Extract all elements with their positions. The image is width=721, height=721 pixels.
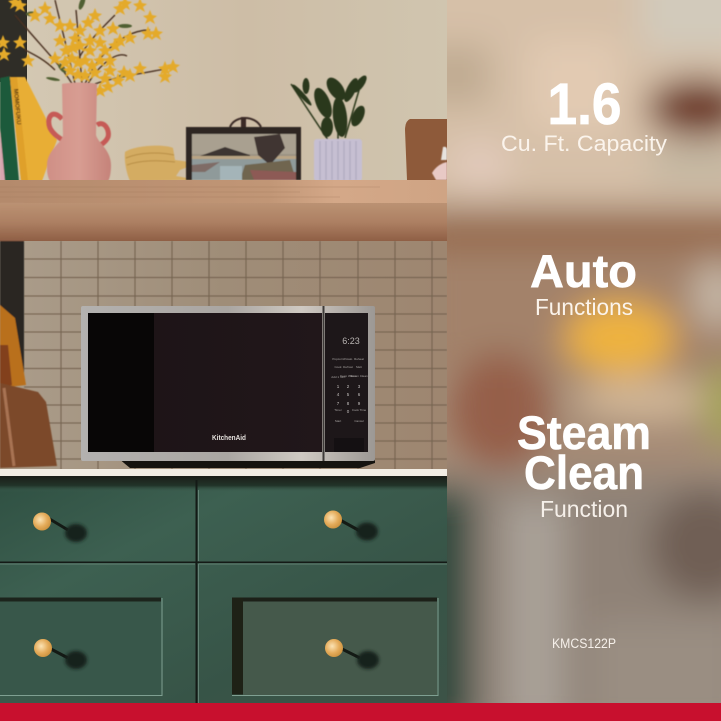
framed picture xyxy=(186,117,301,180)
control panel: Steam Clean xyxy=(350,374,368,378)
knob top left xyxy=(33,512,87,542)
control panel: 4 xyxy=(337,392,340,397)
cabinet gaps xyxy=(0,480,447,703)
feature: steam clean xyxy=(517,406,651,522)
control panel: Timer xyxy=(334,408,342,412)
control panel: Keep Warm xyxy=(340,374,356,378)
microwave door window xyxy=(88,313,322,452)
model number: KMCS122P xyxy=(552,636,616,651)
small pink dishes xyxy=(432,147,447,180)
books: MOMOFUKU xyxy=(12,89,21,125)
Functions caption: Functions xyxy=(535,294,633,320)
lower right drawer recess xyxy=(232,598,438,696)
feature: auto functions xyxy=(530,245,637,320)
control panel: 9 xyxy=(358,401,361,406)
control panel: 0 xyxy=(347,409,350,414)
wooden shelf xyxy=(0,180,447,241)
microwave xyxy=(81,306,375,468)
control panel: Cancel xyxy=(354,419,364,423)
knob top right xyxy=(324,510,378,540)
dark cabinet side and boards xyxy=(0,203,57,468)
Auto heading: Auto xyxy=(530,245,637,297)
cabinets xyxy=(0,476,447,703)
control panel: Reheat xyxy=(354,357,364,361)
tile backsplash xyxy=(0,241,447,470)
control panel: Potato xyxy=(344,357,353,361)
control panel: 5 xyxy=(347,392,350,397)
control panel: Add 1 min xyxy=(331,375,345,379)
control panel: Start xyxy=(335,419,341,423)
red footer bar xyxy=(0,703,721,721)
control panel: 6 xyxy=(358,392,361,397)
dark cabinet side top xyxy=(0,0,27,82)
Function caption: Function xyxy=(540,496,628,522)
1.6 figure: 1.6 xyxy=(548,72,622,137)
knob bottom left xyxy=(34,639,87,669)
control panel: 6:23 xyxy=(342,336,360,346)
gold bowls xyxy=(125,146,198,181)
vase xyxy=(47,82,111,181)
potted plant xyxy=(291,74,369,181)
books xyxy=(0,76,57,181)
control panel: 7 xyxy=(337,401,340,406)
capacity caption: Cu. Ft. Capacity xyxy=(501,131,668,156)
blurred feature panel background xyxy=(447,0,721,703)
control panel: Cook Time xyxy=(352,408,366,412)
countertop xyxy=(0,469,447,476)
control panel xyxy=(325,313,368,452)
Steam Clean heading: Steam xyxy=(517,406,651,459)
cutting board on shelf xyxy=(405,119,447,180)
Steam Clean heading xyxy=(517,406,651,499)
control panel: 2 xyxy=(347,384,350,389)
control panel: Popcorn xyxy=(332,357,344,361)
door gap xyxy=(322,306,324,461)
lower left drawer recess xyxy=(0,598,162,696)
control panel: 8 xyxy=(347,401,350,406)
microwave frame xyxy=(81,306,375,461)
flower branches xyxy=(0,0,180,97)
Steam Clean heading: Clean xyxy=(524,446,644,499)
control panel: Melt xyxy=(356,365,362,369)
knob bottom right xyxy=(325,639,379,669)
control panel: 3 xyxy=(358,384,361,389)
feature: capacity xyxy=(501,72,668,156)
wall background xyxy=(0,0,447,182)
control panel: Cook xyxy=(334,365,342,369)
microwave base shadow xyxy=(118,458,375,468)
control panel: Defrost xyxy=(343,365,353,369)
control panel: 1 xyxy=(337,384,340,389)
brand logo: KitchenAid xyxy=(212,433,246,442)
